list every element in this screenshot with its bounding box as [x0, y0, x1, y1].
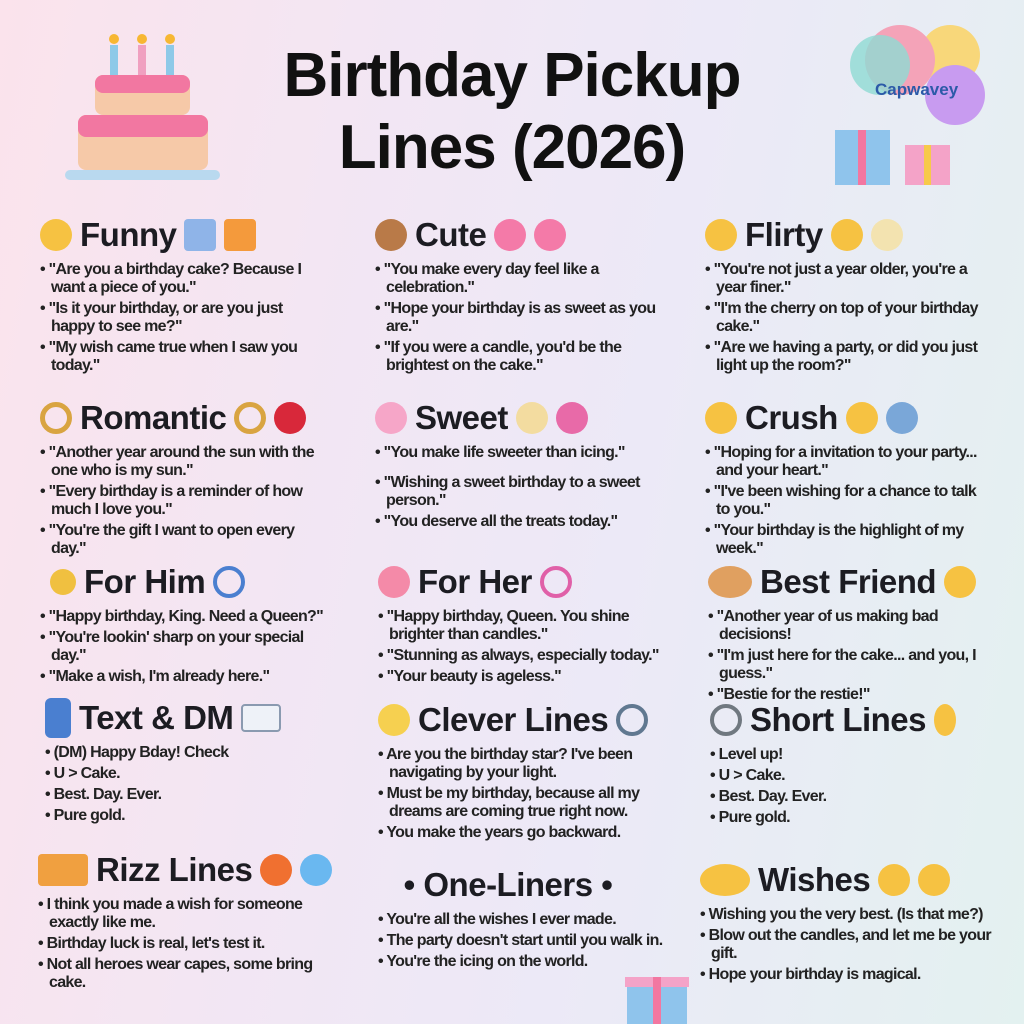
- panel: text & dm: [45, 698, 281, 824]
- panel: short lines: U > Cake.: [719, 767, 785, 784]
- panel: rizz lines: [38, 851, 332, 991]
- panel: funny: "Is it your birthday, or are you just happy to see me?": [49, 300, 283, 335]
- panel: one-liners: You're the icing on the world.: [386, 953, 588, 970]
- panel: text & dm: Best. Day. Ever.: [54, 786, 161, 803]
- panel: one-liners: You're all the wishes I ever made.: [386, 911, 616, 928]
- panel: sweet: Sweet: [415, 399, 508, 436]
- panel: sweet: "You make life sweeter than icing.": [384, 444, 625, 461]
- panel: rizz lines: Birthday luck is real, let's test it.: [47, 935, 265, 952]
- panel: for him: For Him: [84, 563, 205, 600]
- panel: for him: "You're lookin' sharp on your special day.": [49, 629, 304, 664]
- panel: sweet: "You deserve all the treats today.": [384, 513, 617, 530]
- panel: one-liners: [378, 866, 662, 970]
- panel: rizz lines: Rizz Lines: [96, 851, 252, 888]
- panel: clever lines: You make the years go backward.: [386, 824, 620, 841]
- panel: romantic: "You're the gift I want to open every day.": [49, 522, 294, 557]
- panel: best friend: "Bestie for the restie!": [717, 686, 870, 703]
- panel: flirty: "Are we having a party, or did you just light up the room?": [714, 339, 977, 374]
- panel: for her: [378, 563, 659, 685]
- icon: logo balloons and gifts: [835, 25, 985, 185]
- panel: flirty: [705, 216, 978, 374]
- panel: crush: Crush: [745, 399, 838, 436]
- panel: romantic: "Another year around the sun with the one who is my sun.": [49, 444, 314, 479]
- panel: crush: "Hoping for a invitation to your party... and your heart.": [714, 444, 977, 479]
- heading: funny: [40, 216, 256, 253]
- panel: for him: [40, 563, 323, 685]
- panel: wishes: Wishing you the very best. (Is that me?): [709, 906, 983, 923]
- panel: for her: For Her: [418, 563, 532, 600]
- panel: crush: "Your birthday is the highlight of my week.": [714, 522, 964, 557]
- title: [284, 41, 740, 182]
- title: Lines (2026): [339, 113, 685, 182]
- panel: text & dm: U > Cake.: [54, 765, 120, 782]
- icon: birthday cake: [65, 34, 220, 180]
- panel: wishes: Hope your birthday is magical.: [709, 966, 921, 983]
- panel: text & dm: (DM) Happy Bday! Check: [54, 744, 229, 761]
- panel: best friend: Best Friend: [760, 563, 936, 600]
- panel: rizz lines: Not all heroes wear capes, some bring cake.: [47, 956, 312, 991]
- panel: for him: "Make a wish, I'm already here.": [49, 668, 269, 685]
- panel: cute: "If you were a candle, you'd be the brightest on the cake.": [384, 339, 621, 374]
- panel: cute: [375, 216, 656, 374]
- icon: logo balloons and gifts: Capwavey: [875, 80, 959, 99]
- panel: funny: "My wish came true when I saw you today.": [49, 339, 297, 374]
- panel: for her: "Stunning as always, especially today.": [387, 647, 659, 664]
- panel: for her: "Happy birthday, Queen. You shine brighter than candles.": [387, 608, 629, 643]
- panel: crush: [705, 399, 977, 557]
- panel: wishes: Wishes: [758, 861, 870, 898]
- panel: sweet: "Wishing a sweet birthday to a sweet person.": [384, 474, 640, 509]
- panel: flirty: "You're not just a year older, you're a year finer.": [714, 261, 967, 296]
- panel: best friend: [708, 563, 976, 703]
- panel: sweet: [375, 399, 640, 530]
- panel: for him: "Happy birthday, King. Need a Queen?": [49, 608, 323, 625]
- panel: one-liners: The party doesn't start until you walk in.: [387, 932, 662, 949]
- panel: short lines: [710, 701, 956, 826]
- panel: flirty: Flirty: [745, 216, 823, 253]
- panel: clever lines: Clever Lines: [418, 701, 608, 738]
- panel: cute: Cute: [415, 216, 486, 253]
- panel: romantic: Romantic: [80, 399, 226, 436]
- panel: flirty: "I'm the cherry on top of your birthday cake.": [714, 300, 978, 335]
- icon: gift bottom: [625, 977, 689, 1024]
- panel: romantic: [40, 399, 314, 557]
- panel: one-liners: • One-Liners •: [404, 866, 612, 903]
- panel: clever lines: [378, 701, 648, 841]
- panel: short lines: Short Lines: [750, 701, 926, 738]
- panel: clever lines: Must be my birthday, because all my dreams are coming true right now.: [387, 785, 639, 820]
- panel: cute: "You make every day feel like a celebration.": [384, 261, 599, 296]
- panel: best friend: "I'm just here for the cake... and you, I guess.": [717, 647, 976, 682]
- panel: rizz lines: I think you made a wish for someone exactly like me.: [47, 896, 302, 931]
- panel: short lines: Best. Day. Ever.: [719, 788, 826, 805]
- panel: short lines: Pure gold.: [719, 809, 790, 826]
- panel: text & dm: Pure gold.: [54, 807, 125, 824]
- panel: wishes: Blow out the candles, and let me be your gift.: [709, 927, 991, 962]
- panel: clever lines: Are you the birthday star? I've been navigating by your light.: [386, 746, 632, 781]
- panel: crush: "I've been wishing for a chance to talk to you.": [714, 483, 976, 518]
- panel: short lines: Level up!: [719, 746, 783, 763]
- title: Birthday Pickup: [284, 41, 740, 110]
- panel: funny: "Are you a birthday cake? Because I want a piece of you.": [49, 261, 301, 296]
- panel: cute: "Hope your birthday is as sweet as you are.": [384, 300, 655, 335]
- panel: romantic: "Every birthday is a reminder of how much I love you.": [49, 483, 302, 518]
- panel: wishes: [700, 861, 992, 983]
- panel: funny: [40, 216, 301, 374]
- heading: funny: Funny: [80, 216, 176, 253]
- panel: for her: "Your beauty is ageless.": [387, 668, 561, 685]
- panel: text & dm: Text & DM: [79, 699, 233, 736]
- panel: best friend: "Another year of us making bad decisions!: [717, 608, 938, 643]
